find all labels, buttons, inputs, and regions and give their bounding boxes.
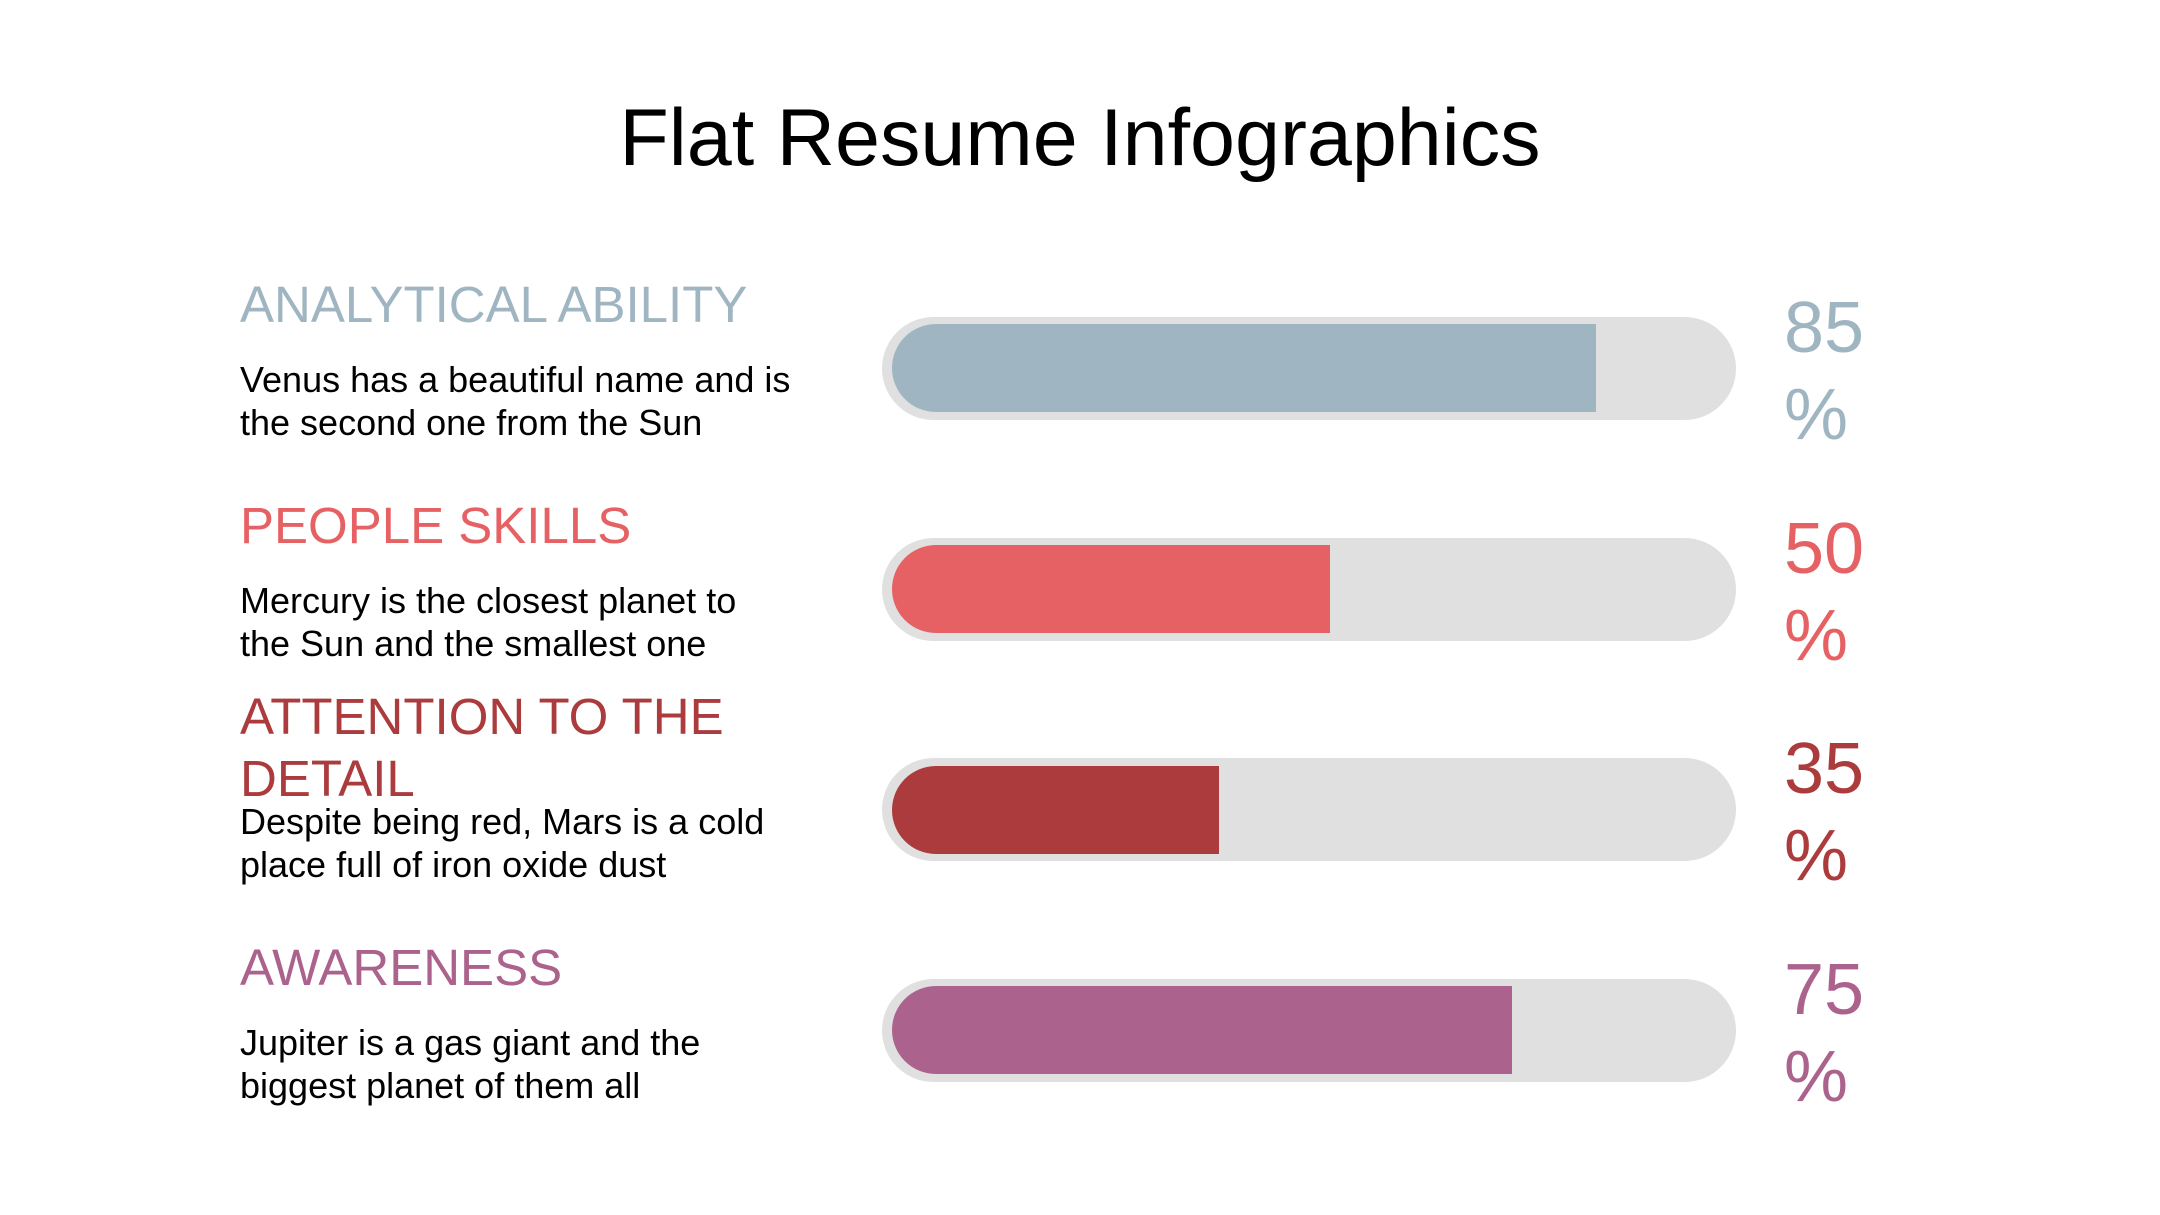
panel: awareness: [240, 939, 1864, 1117]
text: attention to the detail description: Despite being red, Mars is a cold: [240, 801, 764, 842]
progress bar: 35 percent: [882, 758, 1736, 861]
value: 50 percent: 50: [1784, 509, 1864, 589]
heading: attention to the detail: [240, 688, 724, 807]
value: 85 percent: %: [1784, 375, 1848, 455]
heading: people skills: PEOPLE SKILLS: [240, 497, 631, 554]
value: 85 percent: 85: [1784, 288, 1864, 368]
value: 35 percent: [1784, 729, 1864, 896]
progress bar: 75 percent: [882, 979, 1736, 1082]
progress bar: 85 percent: [882, 317, 1736, 420]
text: awareness description: [240, 1022, 700, 1106]
heading: awareness: AWARENESS: [240, 939, 562, 996]
value: 50 percent: %: [1784, 596, 1848, 676]
progress bar: 50 percent: [882, 538, 1736, 640]
value: 75 percent: [1784, 950, 1864, 1117]
text: people skills description: the Sun and the smallest one: [240, 623, 706, 664]
text: analytical ability description: [240, 359, 790, 443]
value: 35 percent: 35: [1784, 729, 1864, 809]
panel: attention to the detail: [240, 688, 1864, 896]
text: awareness description: biggest planet of them all: [240, 1065, 640, 1106]
text: analytical ability description: the second one from the Sun: [240, 402, 702, 443]
text: attention to the detail description: [240, 801, 764, 885]
value: 85 percent: [1784, 288, 1864, 455]
heading: attention to the detail: DETAIL: [240, 750, 415, 807]
text: people skills description: Mercury is the closest planet to: [240, 580, 736, 621]
panel: people skills: [240, 497, 1864, 676]
value: 75 percent: 75: [1784, 950, 1864, 1030]
text: awareness description: Jupiter is a gas giant and the: [240, 1022, 700, 1063]
heading: attention to the detail: ATTENTION TO THE: [240, 688, 724, 745]
value: 75 percent: %: [1784, 1037, 1848, 1117]
value: 50 percent: [1784, 509, 1864, 676]
value: 35 percent: %: [1784, 816, 1848, 896]
panel: analytical ability: [240, 276, 1864, 455]
text: people skills description: [240, 580, 736, 664]
text: attention to the detail description: place full of iron oxide dust: [240, 844, 666, 885]
text: analytical ability description: Venus has a beautiful name and is: [240, 359, 790, 400]
heading: analytical ability: ANALYTICAL ABILITY: [240, 276, 747, 333]
title: Flat Resume Infographics: [619, 93, 1541, 183]
